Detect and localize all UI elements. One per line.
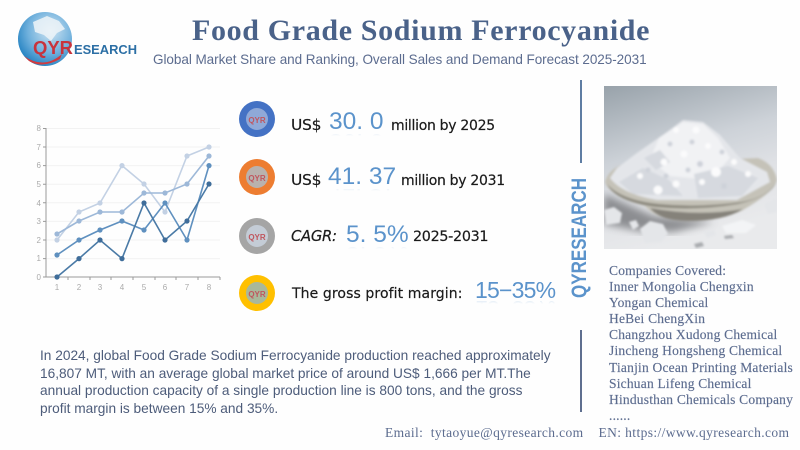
companies list: Changzhou Xudong Chemical xyxy=(609,327,777,342)
line chart xyxy=(36,124,220,292)
vertical brand label: QYRESEARCH xyxy=(568,178,591,298)
line chart: 2 xyxy=(77,283,82,292)
metric: gross profit margin: 15−35% xyxy=(475,277,555,303)
companies list: Sichuan Lifeng Chemical xyxy=(609,376,752,391)
metric: CAGR: CAGR: xyxy=(291,228,337,245)
line chart: 1 xyxy=(55,283,60,292)
icon: market size 2031: QYR xyxy=(248,174,266,183)
summary paragraph: In 2024, global Food Grade Sodium Ferrocyanide production reached approximately xyxy=(40,348,551,363)
companies list xyxy=(609,263,793,423)
summary paragraph: profit margin is between 15% and 35%. xyxy=(40,401,278,416)
metric: CAGR xyxy=(291,221,488,248)
summary paragraph xyxy=(40,348,551,416)
icon: gross margin: QYR xyxy=(248,290,266,299)
metric: 2031 market size xyxy=(291,163,505,190)
metric: 2025 market size: million by 2025 xyxy=(391,118,495,134)
line chart: 3 xyxy=(98,283,103,292)
line chart: 4 xyxy=(120,283,125,292)
metric: gross profit margin xyxy=(292,277,556,303)
metric: 2031 market size: million by 2031 xyxy=(401,173,505,189)
metric: 2031 market size: US$ xyxy=(291,171,321,189)
product photo: salt in a dish xyxy=(604,86,777,249)
scattered crystals xyxy=(604,206,668,236)
companies list: Jincheng Hongsheng Chemical xyxy=(609,343,782,358)
metric: 2031 market size: 41. 37 xyxy=(328,163,396,190)
line chart: 3 xyxy=(37,217,42,226)
line chart: 5 xyxy=(37,180,42,189)
line chart: 8 xyxy=(207,283,212,292)
line chart: 2 xyxy=(37,236,42,245)
icon: gross margin xyxy=(239,275,275,311)
logo: QYResearch: QYR xyxy=(33,38,73,58)
line chart: 7 xyxy=(37,143,42,152)
line chart: 1 xyxy=(37,254,42,263)
line chart: 0 xyxy=(37,273,42,282)
pile xyxy=(610,120,770,200)
icon: market size 2025 xyxy=(239,101,275,137)
shadow xyxy=(604,194,714,232)
summary paragraph: 16,807 MT, with an average global market price of around US$ 1,666 per MT.The xyxy=(40,366,531,381)
metric: gross profit margin: The gross profit margin: xyxy=(292,286,463,302)
icon: CAGR xyxy=(239,218,275,254)
line chart: 6 xyxy=(37,161,42,170)
line chart: 4 xyxy=(37,199,42,208)
companies list: HeBei ChengXin xyxy=(609,311,705,326)
logo: QYResearch xyxy=(18,12,137,66)
subtitle: Global Market Share and Ranking, Overall Sales and Demand Forecast 2025-2031 xyxy=(153,52,647,67)
summary paragraph: annual production capacity of a single production line is 800 tons, and the gross xyxy=(40,383,522,398)
companies list: Hindusthan Chemicals Company xyxy=(609,392,793,407)
icon: market size 2031 xyxy=(239,159,275,195)
dish xyxy=(605,158,777,220)
metric: 2025 market size: 30. 0 xyxy=(329,108,384,135)
line chart: 6 xyxy=(163,283,168,292)
metric: CAGR: 5. 5% xyxy=(346,221,409,248)
metric: CAGR: 2025-2031 xyxy=(413,229,488,245)
contact line: Email: tytaoyue@qyresearch.com EN: https://www.qyresearch.com xyxy=(385,425,789,440)
line chart: 8 xyxy=(37,124,42,133)
icon: CAGR: QYR xyxy=(248,233,266,242)
line chart: 7 xyxy=(185,283,190,292)
title: Food Grade Sodium Ferrocyanide xyxy=(192,14,650,47)
companies list: Tianjin Ocean Printing Materials xyxy=(609,360,793,375)
line chart: 5 xyxy=(142,283,147,292)
companies list: ...... xyxy=(609,408,630,423)
companies list: Inner Mongolia Chengxin xyxy=(609,279,754,294)
icon: market size 2025: QYR xyxy=(248,116,266,125)
companies list: Yongan Chemical xyxy=(609,295,708,310)
metric: 2025 market size xyxy=(291,108,495,135)
companies list: Companies Covered: xyxy=(609,263,726,278)
logo: QYResearch: ESEARCH xyxy=(74,43,137,57)
metric: 2025 market size: US$ xyxy=(291,116,321,134)
